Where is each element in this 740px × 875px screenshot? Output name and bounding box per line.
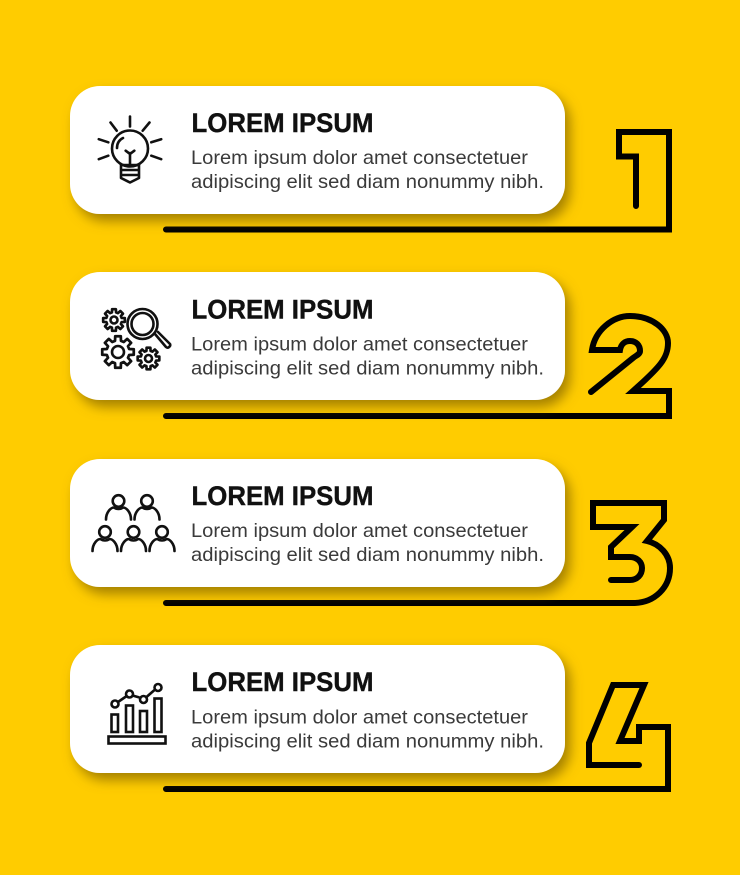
card 1 background bbox=[70, 86, 565, 214]
body text 4: adipiscing elit sed diam nonummy nibh. bbox=[191, 730, 544, 752]
card 3 background bbox=[70, 459, 565, 587]
body text 2: adipiscing elit sed diam nonummy nibh. bbox=[191, 358, 544, 380]
card 4 background bbox=[70, 645, 565, 773]
body text 4: Lorem ipsum dolor amet consectetuer bbox=[191, 706, 529, 728]
panel: step 2 bbox=[70, 272, 669, 416]
icon: gears and magnifier bbox=[102, 309, 170, 369]
heading 3: LOREM IPSUM bbox=[192, 481, 374, 511]
body text 3: adipiscing elit sed diam nonummy nibh. bbox=[191, 544, 544, 566]
body text 1: adipiscing elit sed diam nonummy nibh. bbox=[191, 171, 544, 193]
numeral 1 outline with connector line bbox=[166, 132, 669, 230]
icon: group of people bbox=[92, 495, 174, 551]
panel: step 4 bbox=[70, 645, 668, 789]
icon: light bulb bbox=[99, 116, 161, 182]
body text 3: Lorem ipsum dolor amet consectetuer bbox=[191, 520, 529, 542]
panel: step 3 bbox=[70, 459, 670, 603]
numeral 3 outline with connector line bbox=[166, 503, 670, 603]
body text 2: Lorem ipsum dolor amet consectetuer bbox=[191, 334, 529, 356]
heading 4: LOREM IPSUM bbox=[192, 667, 374, 697]
body text 1: Lorem ipsum dolor amet consectetuer bbox=[191, 147, 529, 169]
icon: bar chart with trend line bbox=[108, 684, 166, 744]
heading 2: LOREM IPSUM bbox=[192, 294, 374, 324]
numeral 4 outline with connector line bbox=[166, 685, 668, 789]
panel: step 1 bbox=[70, 86, 669, 230]
numeral 2 outline with connector line bbox=[166, 316, 669, 416]
card 2 background bbox=[70, 272, 565, 400]
heading 1: LOREM IPSUM bbox=[192, 108, 374, 138]
